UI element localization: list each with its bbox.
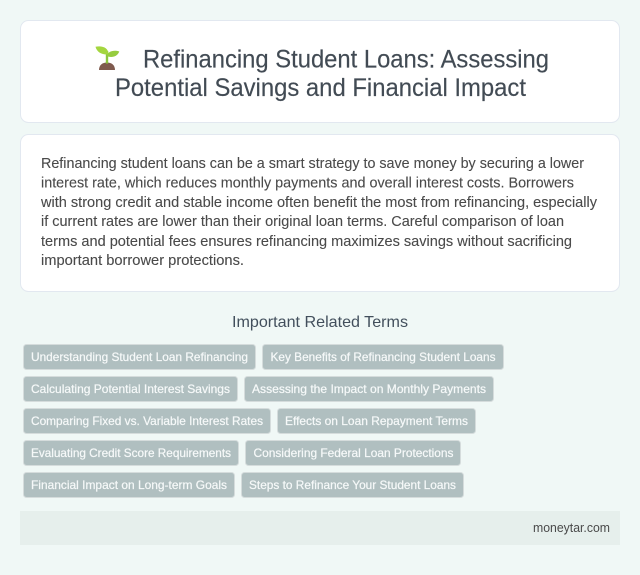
text block: description (40, 156, 598, 269)
tag: Financial Impact on Long-term Goals (31, 478, 227, 492)
text block: description: interest rate, which reduces monthly payments and overall interest costs. Borrowers (41, 176, 574, 192)
title: Potential Savings and Financial Impact (115, 74, 526, 102)
tag: Considering Federal Loan Protections (254, 446, 454, 460)
tag (244, 376, 494, 402)
text block: description: if current rates are lower than their original loan terms. Careful comparison of loan (41, 214, 564, 230)
tag: Key Benefits of Refinancing Student Loans (270, 350, 496, 364)
tag: Comparing Fixed vs. Variable Interest Rates (31, 414, 263, 428)
title: Refinancing Student Loans: Assessing (143, 46, 549, 74)
tag (24, 344, 256, 370)
tag: Assessing the Impact on Monthly Payments (252, 382, 486, 396)
text block: description: important borrower protections. (41, 253, 244, 269)
tag (262, 344, 504, 370)
tag (246, 440, 460, 466)
tag: Evaluating Credit Score Requirements (31, 446, 231, 460)
tag (242, 472, 464, 498)
heading: related terms: Important Related Terms (232, 314, 408, 331)
tag (24, 408, 270, 434)
icon: seedling (96, 46, 119, 70)
panel: related term tags (24, 344, 504, 498)
text block: description: terms and potential fees ensures refinancing maximizes savings without sacrificing (41, 234, 572, 250)
tag (278, 408, 476, 434)
panel: description (20, 134, 620, 292)
tag (24, 376, 238, 402)
panel: title card (20, 20, 620, 122)
tag: Calculating Potential Interest Savings (31, 382, 230, 396)
title (115, 46, 549, 102)
tag: Effects on Loan Repayment Terms (285, 414, 468, 428)
footer (20, 511, 620, 545)
tag (24, 440, 238, 466)
text block: description: Refinancing student loans can be a smart strategy to save money by securing a lower (41, 156, 584, 172)
text block: description: with strong credit and stable income often benefit the most from refinancing, especially (40, 195, 598, 211)
tag (24, 472, 234, 498)
tag: Steps to Refinance Your Student Loans (249, 478, 456, 492)
tag: Understanding Student Loan Refinancing (31, 350, 248, 364)
footer: moneytar.com (533, 520, 610, 535)
